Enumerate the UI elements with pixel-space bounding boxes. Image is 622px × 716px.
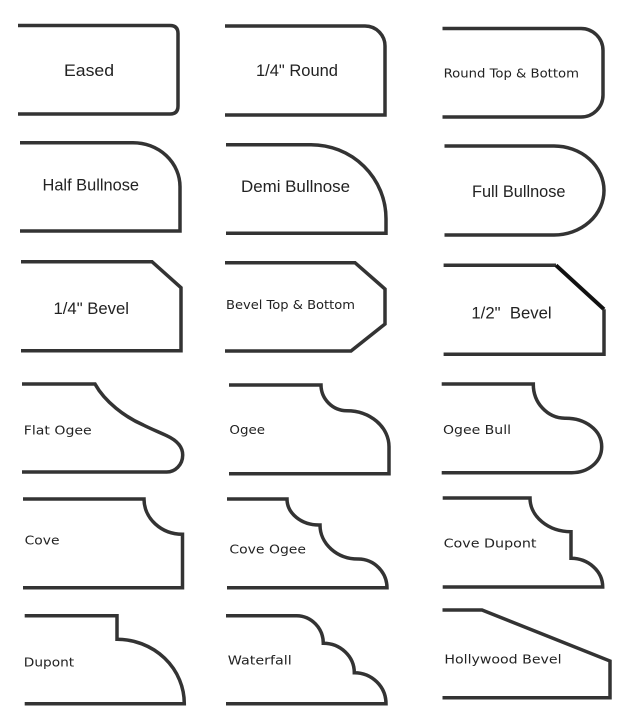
profile: Eased: Eased — [64, 61, 114, 80]
profile: Cove Dupont: Cove Dupont — [444, 537, 537, 551]
profile: Hollywood Bevel — [442, 610, 610, 698]
profile: 1/2" Bevel — [444, 265, 604, 354]
profile: Ogee Bull: Ogee Bull — [443, 423, 511, 437]
profile: 1/4" Bevel: 1/4" Bevel — [54, 299, 129, 318]
profile: Flat Ogee — [22, 384, 183, 472]
profile: Demi Bullnose: Demi Bullnose — [241, 177, 350, 196]
profile: Full Bullnose: Full Bullnose — [472, 182, 566, 201]
profile: 1/2" Bevel: 1/2" Bevel — [471, 303, 552, 322]
profile: Round Top & Bottom — [442, 28, 603, 117]
profile: Ogee Bull — [442, 384, 602, 473]
profile: Full Bullnose — [444, 146, 604, 235]
profile: Eased — [18, 26, 178, 114]
profile: 1/4" Bevel — [21, 262, 181, 351]
profile: Flat Ogee: Flat Ogee — [24, 423, 92, 437]
profile: Ogee — [229, 385, 389, 474]
profile: Bevel Top & Bottom — [225, 263, 385, 351]
profile: Waterfall — [226, 616, 386, 704]
profile: Cove — [23, 499, 182, 588]
profile: Dupont: Dupont — [24, 656, 75, 670]
profile: Hollywood Bevel: Hollywood Bevel — [444, 652, 562, 666]
profile: Cove Ogee — [227, 499, 387, 588]
profile: Half Bullnose: Half Bullnose — [42, 176, 139, 195]
profile: Ogee: Ogee — [229, 423, 265, 437]
profile: Bevel Top & Bottom: Bevel Top & Bottom — [226, 298, 355, 312]
profile: Round Top & Bottom: Round Top & Bottom — [444, 67, 579, 81]
profile: Cove Ogee: Cove Ogee — [229, 543, 306, 557]
profile: Dupont — [24, 616, 184, 704]
profile: Cove Dupont — [443, 498, 603, 587]
profile: 1/4" Round — [225, 26, 385, 115]
profile: Waterfall: Waterfall — [228, 654, 292, 668]
profile: 1/4" Round: 1/4" Round — [256, 61, 338, 80]
profile: Demi Bullnose — [226, 145, 386, 233]
profile: Cove: Cove — [25, 533, 60, 547]
profile: Half Bullnose — [20, 143, 180, 231]
